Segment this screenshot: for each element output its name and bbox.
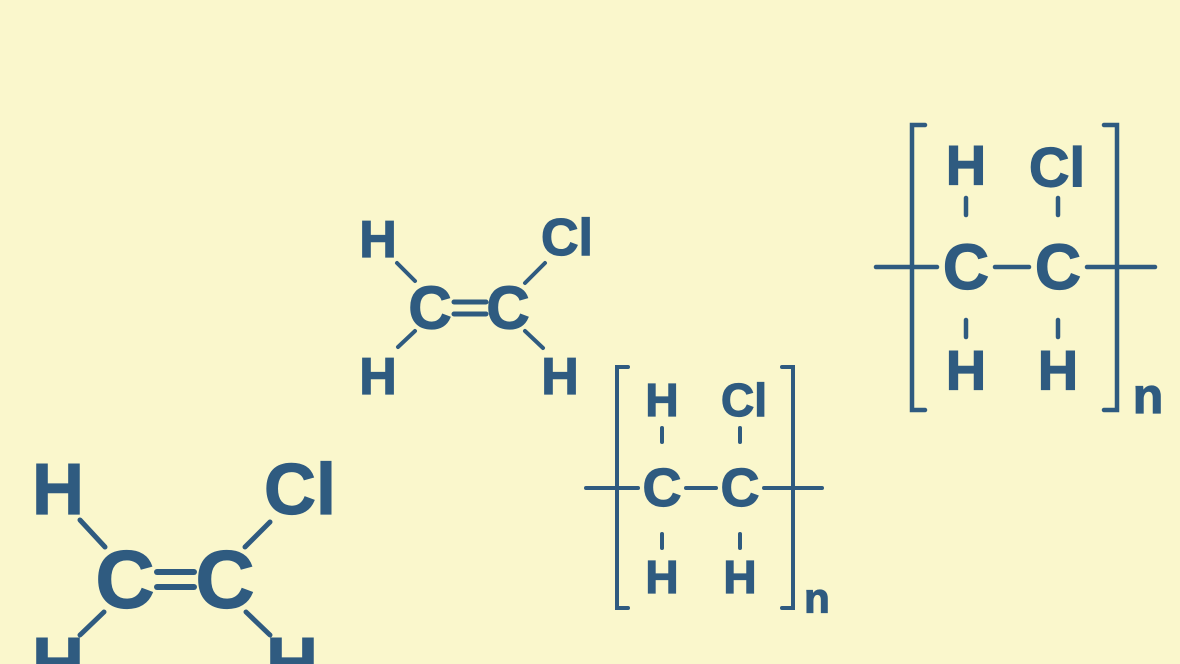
polymer: PVC repeat unit small — [586, 367, 830, 622]
polymer: PVC repeat unit large: H — [1038, 338, 1078, 402]
molecule: vinyl chloride medium: C — [486, 274, 530, 342]
polymer: PVC repeat unit large: C — [1035, 231, 1081, 303]
polymer: PVC repeat unit large: C — [943, 231, 989, 303]
molecule: vinyl chloride large: Cl — [264, 450, 336, 530]
polymer: PVC repeat unit large: Cl — [1029, 136, 1085, 198]
molecule: vinyl chloride medium — [359, 209, 593, 406]
polymer: PVC repeat unit large: H — [946, 134, 986, 196]
polymer: PVC repeat unit large — [876, 125, 1163, 424]
polymer: PVC repeat unit small: n — [804, 574, 830, 622]
polymer: PVC repeat unit small: H — [723, 551, 757, 603]
polymer: PVC repeat unit small: Cl — [721, 374, 767, 426]
polymer: PVC repeat unit large: n — [1133, 368, 1163, 424]
molecule: vinyl chloride large: C — [95, 534, 155, 626]
polymer: PVC repeat unit small: C — [720, 458, 760, 518]
molecule: vinyl chloride medium: C — [408, 274, 452, 342]
molecule: vinyl chloride large: H — [32, 450, 84, 530]
polymer: PVC repeat unit small: H — [645, 374, 679, 426]
molecule: vinyl chloride large: C — [195, 534, 255, 626]
polymer: PVC repeat unit small: C — [642, 458, 682, 518]
molecule: vinyl chloride medium: Cl — [541, 209, 593, 267]
molecule: vinyl chloride medium: H — [359, 211, 397, 269]
polymer: PVC repeat unit small: H — [645, 551, 679, 603]
polymer: PVC repeat unit large: H — [946, 338, 986, 402]
molecule: vinyl chloride medium: H — [541, 348, 579, 406]
molecule: vinyl chloride medium: H — [359, 348, 397, 406]
molecule: vinyl chloride large — [32, 450, 336, 664]
